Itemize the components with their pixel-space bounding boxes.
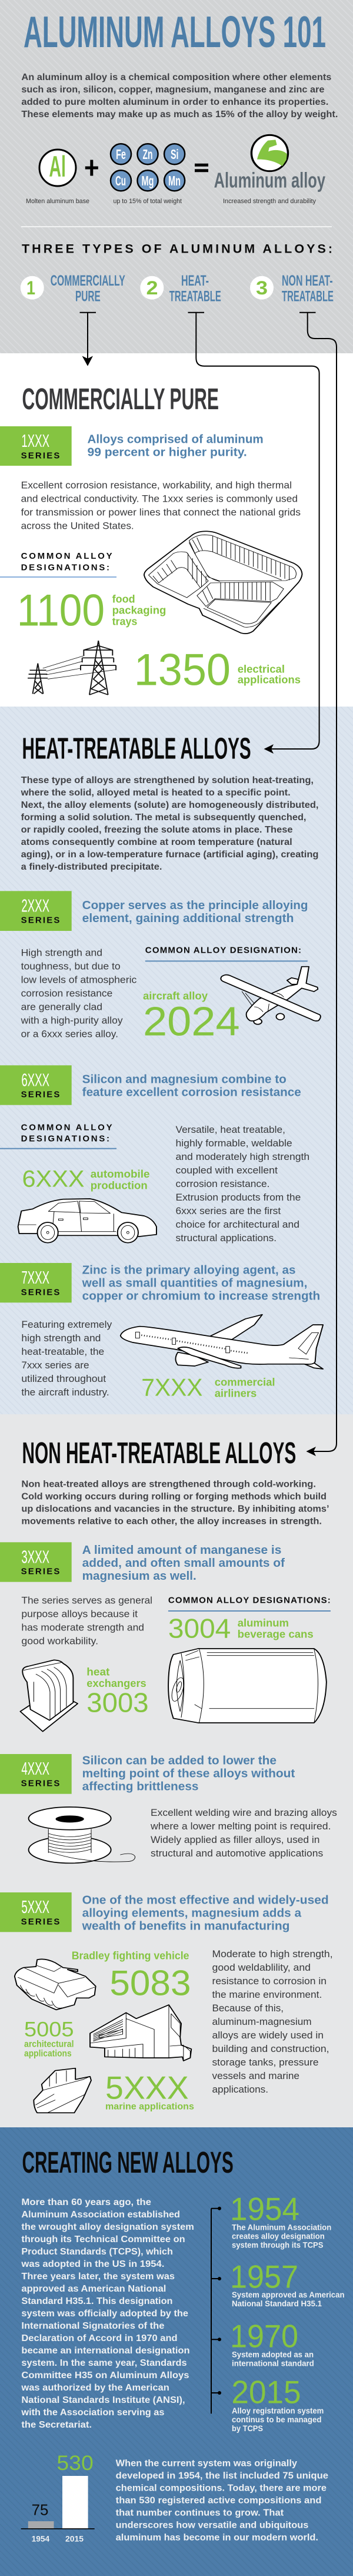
body: 7xxx: heat-treatable, the [21,1346,104,1357]
body: heat-treatable intro: These type of alloys are strengthened by solution heat-treating, [21,775,314,785]
timeline 2015: 2015 [231,2374,301,2411]
body: history text [21,2197,194,2430]
icon: alloying elements circles: Mg [141,173,154,188]
body: history text: approved as American National [21,2284,166,2294]
stat: 5005 architectural: applications [24,2048,72,2058]
body: heat-treatable intro: or rapidly cooled, freezing the solute atoms in place. These [21,825,293,835]
body: 7xxx: the aircraft industry. [21,1387,109,1398]
bar chart: compositions 1954 vs 2015: 530 [56,2452,94,2475]
body: 6xxx: coupled with excellent [175,1165,278,1176]
type 1 label [21,273,125,305]
subheading: 2xxx: element, gaining additional strength [82,912,294,925]
icon: tank [15,1959,96,2010]
body: 6xxx: corrosion resistance. [175,1178,269,1189]
stat: 5083 bradley: 5083 [109,1963,191,2003]
icon: airliner [121,1315,323,1369]
body: 2xxx: are generally clad [21,1001,102,1012]
intro text [21,72,338,120]
subheading: 7xxx: Zinc is the primary alloying agent, as [82,1264,295,1277]
body: 1xxx [21,479,301,531]
subheading: 7xxx: copper or chromium to increase strength [82,1289,320,1302]
timeline 2015: continus to be managed [232,2415,321,2424]
subheading: 6xxx [82,1073,301,1099]
body: 2xxx [21,947,137,1039]
subheading: 4xxx: Silicon can be added to lower the [82,1755,277,1768]
stat: 7xxx commercial airliners: airliners [215,1387,257,1400]
timeline 1970 [230,2318,314,2368]
icon: alloying elements circles [111,144,185,191]
common alloy designation label: COMMON ALLOY DESIGNATION: [145,946,301,956]
subheading: 4xxx: melting point of these alloys without [82,1768,295,1781]
icon: alloying elements circles: Si [171,147,179,162]
series badge: 6xxx: 6XXX [21,1069,49,1090]
heading: three types: THREE TYPES OF ALUMINUM ALLOYS: [22,241,332,256]
body: history text: with the Association serving as [21,2408,164,2418]
panel: non heat-treatable background [0,1414,353,2127]
series badge: 7xxx: SERIES [21,1287,59,1297]
equation diagram [26,135,325,205]
body: non heat-treatable intro: up dislocations and vacancies in the structure. By inhibiting atoms’ [21,1504,329,1514]
stat: 2024 aircraft alloy: 2024 [143,998,240,1044]
timeline 1957 [230,2258,345,2308]
body: 6xxx: and moderately high strength [175,1151,309,1162]
type 2 label: 2 [146,277,158,299]
panel: intro background [0,0,353,353]
panel: creating new alloys background [0,2127,353,2576]
icon: plus [85,160,98,175]
subheading: 1xxx: 99 percent or higher purity. [87,446,247,459]
stat: 7xxx commercial airliners: commercial [215,1375,275,1388]
body: compositions text: underscores how versatile and ubiquitous [116,2520,308,2530]
subheading: 4xxx [82,1755,295,1793]
timeline 1957: 1957 [230,2258,298,2295]
body: history text: Committee H35 on Aluminum Alloys [21,2371,189,2381]
bar chart: compositions 1954 vs 2015: 75 [32,2501,48,2519]
subheading: 5xxx [82,1894,329,1932]
timeline 2015: by TCPS [232,2424,263,2433]
common alloy designations label: DESIGNATIONS: [21,562,109,572]
body: non heat-treatable intro [21,1480,329,1527]
body: heat-treatable intro: a finely-distributed precipitate. [21,862,162,872]
body: history text: through its Technical Committee on [21,2234,185,2245]
type 2 label [140,273,221,305]
timeline 1954 [230,2191,331,2249]
body: 3xxx: good workability. [21,1635,98,1646]
common alloy designations label: COMMON ALLOY [21,551,112,561]
stat: 5083 bradley [72,1950,191,2003]
body: compositions text: aluminum has become in our modern world. [116,2532,318,2542]
series badge: 5xxx: 5XXX [21,1897,49,1917]
body: 6xxx: structural applications. [175,1232,277,1244]
body: 4xxx: structural and automotive applications [151,1848,323,1859]
stat: 1100: food [112,592,135,605]
body: history text: the wrought alloy designation system [21,2222,194,2232]
subheading: 5xxx: wealth of benefits in manufacturing [82,1919,289,1932]
stat: 1100 [17,586,166,636]
subheading: 7xxx: well as small quantities of magnesium, [82,1277,307,1289]
series badge: 7xxx: 7XXX [21,1267,49,1288]
series badge: 2xxx: SERIES [21,916,59,926]
body: history text: was adopted in the US in 1954. [21,2259,164,2269]
body: 2xxx: with a high-purity alloy [21,1015,123,1026]
series badge: 6xxx [0,1065,72,1105]
series badge: 4xxx [0,1754,72,1794]
stat: 3004 beverage cans [168,1613,314,1644]
common alloy designations label [21,551,112,572]
body: 3xxx: The series serves as general [21,1594,152,1606]
panel: heat-treatable background [0,707,353,1414]
body: 5xxx: building and construction, [212,2043,329,2054]
body: history text: More than 60 years ago, the [21,2197,151,2207]
timeline 1954: system through its TCPS [232,2240,324,2249]
body: history text: Declaration of Accord in 1970 and [21,2333,178,2343]
body: heat-treatable intro: Next, the alloy elements (solute) are homogeneously distributed, [21,800,318,810]
body: history text: was authorized by the American [21,2383,169,2393]
icon: small aircraft [221,967,321,1025]
stat: 7xxx commercial airliners: 7XXX [141,1374,202,1401]
icon: car [18,1199,156,1243]
stat: 3003 heat exchangers: 3003 [86,1687,149,1718]
subheading: 2xxx [82,899,308,925]
series badge: 3xxx: 3XXX [21,1546,49,1567]
heading: commercially pure: COMMERCIALLY PURE [22,382,219,416]
stat: 3004 beverage cans: beverage cans [238,1628,314,1640]
type 1 label: 1 [26,277,35,299]
icon: building [90,2005,191,2061]
series badge: 1xxx [0,426,72,466]
body: 7xxx: 7xxx series are [21,1360,89,1371]
body: 1xxx: across the United States. [21,520,134,531]
body: 2xxx: corrosion resistance [21,987,112,999]
type 1 label: COMMERCIALLY [51,273,125,289]
stat: 1100: 1100 [17,586,105,636]
stat: 5083 bradley: Bradley fighting vehicle [72,1950,189,1962]
stat: 1100: trays [112,615,137,628]
type 1 label: PURE [75,289,101,305]
body: history text: Product Standards (TCPS), which [21,2247,173,2257]
body: 3xxx [21,1594,152,1646]
body: compositions text: than 530 registered active compositions and [116,2495,321,2505]
intro text: such as iron, silicon, copper, magnesium, manganese and zinc are [21,85,325,95]
stat: 3004 beverage cans: 3004 [168,1613,231,1644]
bar chart: compositions 1954 vs 2015 [21,2452,95,2544]
icon: boat [34,2068,91,2113]
body: non heat-treatable intro: Cold working occurs during rolling or forging methods which build [21,1492,327,1502]
body: 7xxx: Featuring extremely [21,1319,112,1330]
arrow: to commercially pure [80,313,96,366]
timeline 1957: System approved as American [232,2290,345,2299]
stat: 1100: packaging [112,604,166,616]
stat: 3004 beverage cans: aluminum [238,1616,289,1629]
stat: 6xxx automobile: 6XXX [22,1166,85,1192]
stat: 2024 aircraft alloy: aircraft alloy [143,990,208,1002]
body: history text: International Signatories of the [21,2321,165,2331]
body: 5xxx: vessels and marine [212,2070,299,2081]
icon: food tray [144,531,302,634]
body: 5xxx: aluminum-magnesium [212,2016,312,2027]
subheading: 3xxx: magnesium as well. [82,1570,197,1583]
stat: 6xxx automobile: production [91,1179,148,1191]
body: history text: National Standards Institute (ANSI), [21,2395,185,2405]
timeline 1954: 1954 [230,2191,299,2227]
common alloy designations label: DESIGNATIONS: [21,1134,109,1144]
icon: alloying elements circles: Mn [168,173,181,188]
body: 6xxx: Extrusion products from the [175,1192,301,1203]
timeline 1970: 1970 [230,2318,298,2355]
body: 3xxx: has moderate strength and [21,1622,144,1633]
subheading: 3xxx: A limited amount of manganese is [82,1544,281,1557]
body: 4xxx: Widely applied as filler alloys, used in [151,1834,319,1845]
body: 5xxx: Moderate to high strength, [212,1948,333,1960]
body: 1xxx: Excellent corrosion resistance, workability, and high thermal [21,479,292,490]
body: 1xxx: for transmission or power lines that connect the national grids [21,506,301,518]
timeline 2015 [231,2374,324,2433]
subheading: 3xxx: added, and often small amounts of [82,1557,285,1570]
stat: 6xxx automobile: automobile [91,1168,149,1180]
stat: 5xxx marine: 5XXX [105,2069,189,2106]
body: 5xxx [212,1948,333,2095]
arrow: to non heat-treatable [299,313,337,1456]
icon: equals [195,164,208,172]
timeline 2015: Alloy registration system [232,2406,324,2415]
body: history text: Three years later, the system was [21,2272,175,2282]
body: 3xxx: purpose alloys because it [21,1608,138,1619]
body: heat-treatable intro: forming a solid solution. The metal is subsequently quenched, [21,813,306,823]
subheading: 6xxx: feature excellent corrosion resistance [82,1086,301,1099]
subheading: 1xxx [87,433,264,459]
body: history text: the Secretariat. [21,2420,92,2430]
series badge: 3xxx [0,1542,72,1582]
type 3 label: 3 [256,277,268,299]
body: 7xxx [21,1319,112,1398]
stat: 5005 architectural [24,2018,74,2058]
captions: Increased strength and durability [223,198,316,205]
body: non heat-treatable intro: movements relative to each other, the alloy increases in strength. [21,1517,322,1527]
body: 2xxx: low levels of atmospheric [21,974,137,985]
body: 6xxx: choice for architectural and [175,1219,299,1230]
body: history text: Standard H35.1. This designation [21,2296,173,2306]
series badge: 7xxx [0,1263,72,1302]
bar chart: compositions 1954 vs 2015: 1954 [32,2534,49,2544]
icon: aluminum base circle [39,150,76,186]
series badge: 5xxx: SERIES [21,1917,59,1927]
body: 6xxx: 6xxx series are the first [175,1205,281,1216]
subheading: 1xxx: Alloys comprised of aluminum [87,433,264,446]
body: compositions text: chemical compositions. Today, there are more [116,2483,327,2493]
body: 6xxx: Versatile, heat treatable, [175,1124,285,1135]
stat: 1350: 1350 [134,645,231,695]
icon: alloying elements circles: Fe [116,147,126,162]
body: 4xxx [150,1807,337,1859]
body: compositions text: When the current system was originally [116,2458,297,2468]
stat: 1350: electrical [238,662,285,675]
common alloy designations label: COMMON ALLOY [21,1122,112,1132]
timeline 1954: creates alloy designation [232,2232,325,2240]
body: 6xxx: highly formable, weldable [175,1138,292,1149]
subheading: 7xxx [82,1264,320,1302]
body: heat-treatable intro: where the solid, alloyed metal is heated to a specific point. [21,788,291,798]
body: 6xxx [175,1124,309,1244]
subheading: 5xxx: One of the most effective and widely-used [82,1894,329,1907]
arrow: to heat-treatable [188,313,319,754]
body: compositions text: developed in 1954, the list included 75 unique [116,2471,328,2481]
body: non heat-treatable intro: Non heat-treated alloys are strengthened through cold-working. [21,1480,316,1490]
subheading: 4xxx: affecting brittleness [82,1781,199,1793]
timeline 1970: System adopted as an [232,2350,314,2359]
icon: alloying elements circles: Zn [142,147,153,162]
body: heat-treatable intro [21,775,319,872]
body: 5xxx: resistance to corrosion in [212,1975,327,1987]
stat: 3003 heat exchangers: exchangers [86,1677,146,1689]
stat: 5005 architectural: 5005 [24,2018,74,2041]
series badge: 2xxx: 2XXX [21,895,49,916]
bar chart: compositions 1954 vs 2015: 2015 [65,2534,84,2544]
body: 7xxx: utilized throughout [21,1373,106,1384]
series badge: 2xxx [0,891,72,931]
captions: Molten aluminum base [26,198,89,205]
timeline [211,2191,345,2433]
body: compositions text: that number continues to grow. That [116,2508,284,2518]
series badge: 1xxx: SERIES [21,450,59,460]
stat: 5xxx marine: marine applications [105,2101,194,2111]
stat: 6xxx automobile [22,1166,149,1192]
body: 5xxx: alloys are widely used in [212,2030,324,2041]
body: 1xxx: and electrical conductivity. The 1xxx series is commonly used [21,493,298,504]
body: 4xxx: where a lower melting point is required. [150,1821,331,1832]
intro text: added to pure molten aluminum in order to enhance its properties. [21,97,328,107]
series badge: 4xxx: SERIES [21,1778,59,1788]
icon: transmission towers [28,641,116,695]
icon: heat exchanger [20,1660,78,1732]
icon: beverage can [168,1649,327,1723]
body: 7xxx: high strength and [21,1332,101,1344]
series badge: 3xxx: SERIES [21,1567,59,1577]
series badge: 4xxx: 4XXX [21,1758,49,1779]
intro text: An aluminum alloy is a chemical composition where other elements [21,72,331,82]
type 3 label [250,273,334,305]
common alloy designations label: COMMON ALLOY DESIGNATIONS: [168,1596,331,1606]
body: 5xxx: good weldablility, and [212,1962,311,1973]
icon: alloying elements circles: Cu [115,173,126,188]
body: 5xxx: the marine environment. [212,1989,322,2000]
stat: 7xxx commercial airliners [141,1374,275,1401]
body: 5xxx: applications. [212,2084,268,2095]
body: 5xxx: Because of this, [212,2003,284,2014]
subheading: 5xxx: alloying elements, magnesium adds a [82,1907,302,1919]
type 2 label: HEAT- [181,273,209,289]
captions: up to 15% of total weight [113,198,182,205]
body: history text: became an international designation [21,2346,190,2356]
body: history text: Aluminum Association established [21,2210,180,2220]
intro text: These elements may make up as much as 15% of the alloy by weight. [21,110,338,120]
body: 2xxx: toughness, but due to [21,960,121,972]
common alloy designations label [21,1122,112,1144]
stat: 5005 architectural: architectural [24,2040,74,2050]
body: compositions text [116,2458,328,2542]
series badge: 6xxx: SERIES [21,1090,59,1100]
icon: wire spool [29,1807,135,1863]
icon: muscle circle [251,135,288,171]
body: heat-treatable intro: aging), or in a low-temperature furnace (artificial aging), creating [21,850,318,860]
timeline line and markers [211,2207,221,2413]
body: 4xxx: Excellent welding wire and brazing alloys [151,1807,337,1818]
type 2 label: TREATABLE [169,289,221,305]
stat: 1350: applications [238,674,301,686]
timeline 1970: international standard [232,2359,314,2368]
panel: commercially pure background [0,353,353,707]
body: 2xxx: or a 6xxx series alloy. [21,1028,118,1039]
captions [26,198,316,205]
series badge: 5xxx [0,1892,72,1932]
icon: aluminum base circle: Al [49,150,66,183]
body: 2xxx: High strength and [21,947,102,958]
body: 5xxx: storage tanks, pressure [212,2057,319,2068]
series badge: 1xxx: 1XXX [21,430,49,451]
subheading: 2xxx: Copper serves as the principle alloying [82,899,308,912]
stat: 3003 heat exchangers: heat [86,1666,109,1678]
body: heat-treatable intro: atoms consequently combine at room temperature (natural [21,837,292,847]
subheading: 3xxx [82,1544,285,1583]
stat: 3003 heat exchangers [86,1666,149,1718]
body: history text: system. In the same year, Standards [21,2358,187,2368]
timeline 1957: National Standard H35.1 [232,2299,322,2308]
stat: 1350 [134,645,301,695]
subheading: 6xxx: Silicon and magnesium combine to [82,1073,287,1086]
body: history text: system was officially adopted by the [21,2309,188,2319]
timeline 1954: The Aluminum Association [232,2223,331,2232]
